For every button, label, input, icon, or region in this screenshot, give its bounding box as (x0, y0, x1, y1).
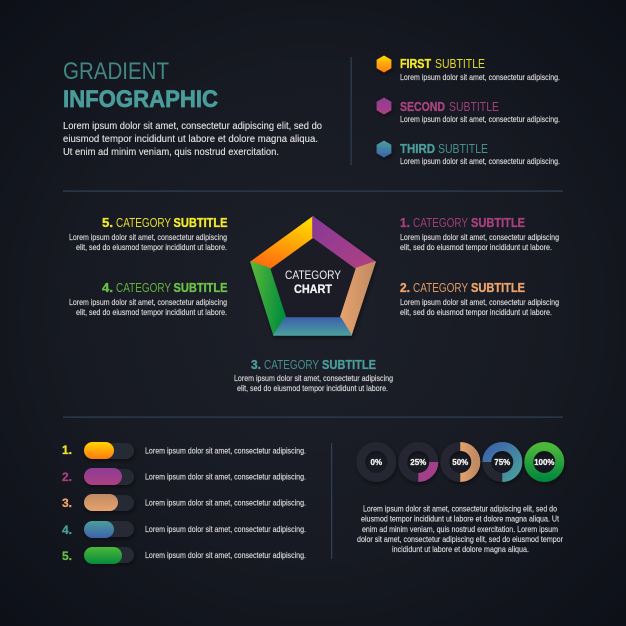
donut 25% (403, 446, 434, 478)
segment 1: purple (313, 217, 375, 268)
donut 25%: 25% (410, 458, 426, 467)
progress row 2: 2. (62, 470, 72, 484)
category 1 text: 1. (400, 216, 410, 230)
category 3 text: SUBTITLE (322, 358, 376, 372)
icon: yellow hexagon (377, 56, 391, 72)
category 4 text (69, 281, 228, 317)
donut 75% (487, 446, 518, 478)
donut 100%: 100% (534, 458, 555, 467)
bottom paragraph: incididunt ut labore et dolore magna aliqua. (392, 544, 529, 554)
progress row 4 (62, 521, 306, 538)
donut 0%: 0% (371, 458, 382, 467)
category 3 text: elit, sed do eiusmod tempor incididunt ut labore. (237, 383, 388, 393)
progress row 5: Lorem ipsum dolor sit amet, consectetur adipiscing. (145, 550, 306, 560)
category 2 text: CATEGORY (413, 281, 469, 295)
progress row 3 (62, 494, 306, 511)
category 2 text: Lorem ipsum dolor sit amet, consectetur adipiscing (400, 297, 559, 307)
progress row 1: Lorem ipsum dolor sit amet, consectetur adipiscing. (145, 446, 306, 456)
category 5 text (69, 216, 228, 252)
progress row 3: 3. (62, 496, 72, 510)
legend: third subtitle (377, 141, 560, 166)
bottom paragraph (357, 504, 563, 554)
heading: gradient infographic: GRADIENT (63, 58, 169, 85)
category 1 text: SUBTITLE (471, 216, 525, 230)
legend: first subtitle: SUBTITLE (435, 57, 485, 71)
segment 5: yellow (251, 217, 313, 268)
category 5 text: Lorem ipsum dolor sit amet, consectetur adipiscing (69, 232, 227, 242)
legend: second subtitle: Lorem ipsum dolor sit amet, consectetur adipiscing. (400, 114, 560, 124)
category 2 text: elit, sed do eiusmod tempor incididunt ut labore. (400, 307, 552, 317)
heading: gradient infographic: INFOGRAPHIC (63, 86, 218, 113)
category 3 text: Lorem ipsum dolor sit amet, consectetur adipiscing (234, 373, 393, 383)
segment 4: green (251, 262, 286, 335)
intro paragraph: Lorem ipsum dolor sit amet, consectetur adipiscing elit, sed do (63, 120, 322, 132)
donut 0% (361, 446, 392, 478)
legend: second subtitle (377, 98, 560, 124)
progress row 5 (62, 547, 306, 564)
bottom paragraph: dolor sit amet, consectetur adipiscing elit, sed do eiusmod tempor (357, 534, 563, 544)
progress row 4: 4. (62, 523, 72, 537)
category 2 text: SUBTITLE (471, 281, 525, 295)
category 3 text (234, 358, 393, 393)
category 4 text: elit, sed do eiusmod tempor incididunt ut labore. (76, 307, 227, 317)
category 5 text: SUBTITLE (174, 216, 228, 230)
category 4 text: 4. (102, 281, 113, 295)
category 3 text: CATEGORY (264, 358, 320, 372)
legend: first subtitle (377, 56, 560, 82)
category 5 text: CATEGORY (116, 216, 172, 230)
category 4 text: CATEGORY (116, 281, 172, 295)
bottom paragraph: eiusmod tempor incididunt ut labore et dolore magna aliqua. Ut (361, 514, 560, 524)
category 4 text: SUBTITLE (174, 281, 228, 295)
legend: second subtitle: SECOND (400, 100, 445, 114)
progress row 5: 5. (62, 549, 72, 563)
progress row 4: Lorem ipsum dolor sit amet, consectetur adipiscing. (145, 524, 306, 534)
legend: second subtitle: SUBTITLE (449, 100, 499, 114)
donut 100% (529, 446, 560, 478)
progress row 1: 1. (62, 443, 72, 457)
progress row 3: Lorem ipsum dolor sit amet, consectetur adipiscing. (145, 498, 306, 508)
donut 50%: 50% (452, 458, 468, 467)
category 1 text: Lorem ipsum dolor sit amet, consectetur adipiscing (400, 232, 559, 242)
progress row 2 (62, 468, 306, 485)
category 5 text: elit, sed do eiusmod tempor incididunt ut labore. (76, 242, 227, 252)
segment 3: blue teal (274, 318, 351, 335)
intro paragraph (63, 120, 322, 158)
category 2 text: 2. (400, 281, 410, 295)
legend: third subtitle: THIRD (400, 142, 435, 156)
intro paragraph: eiusmod tempor incididunt ut labore et dolore magna aliqua. (63, 133, 318, 145)
bottom paragraph: enim ad minim veniam, quis nostrud exercitation. Lorem ipsum (362, 524, 558, 534)
intro paragraph: Ut enim ad minim veniam, quis nostrud exercitation. (63, 146, 279, 158)
heading: gradient infographic (63, 58, 218, 113)
category 1 text (400, 216, 559, 252)
pentagon base shadow (251, 217, 375, 335)
icon: blue hexagon (377, 141, 391, 157)
icon: purple hexagon (377, 98, 391, 114)
progress row 2: Lorem ipsum dolor sit amet, consectetur adipiscing. (145, 472, 306, 482)
chart label: CATEGORY (285, 270, 341, 282)
legend: first subtitle: FIRST (400, 57, 431, 71)
category 1 text: CATEGORY (413, 216, 469, 230)
category 5 text: 5. (102, 216, 113, 230)
progress row 1 (62, 442, 306, 459)
donut 50% (445, 446, 476, 478)
donut 75%: 75% (494, 458, 510, 467)
category 4 text: Lorem ipsum dolor sit amet, consectetur adipiscing (69, 297, 227, 307)
bottom paragraph: Lorem ipsum dolor sit amet, consectetur adipiscing elit, sed do (363, 504, 557, 514)
legend: third subtitle: SUBTITLE (438, 142, 488, 156)
chart label (285, 270, 341, 296)
category 3 text: 3. (251, 358, 261, 372)
category 1 text: elit, sed do eiusmod tempor incididunt ut labore. (400, 242, 552, 252)
category 2 text (400, 281, 559, 317)
legend: first subtitle: Lorem ipsum dolor sit amet, consectetur adipiscing. (400, 72, 560, 82)
pentagon chart (251, 217, 375, 335)
segment 2: peach (340, 262, 375, 335)
legend: third subtitle: Lorem ipsum dolor sit amet, consectetur adipiscing. (400, 156, 560, 166)
chart label: CHART (294, 284, 332, 296)
